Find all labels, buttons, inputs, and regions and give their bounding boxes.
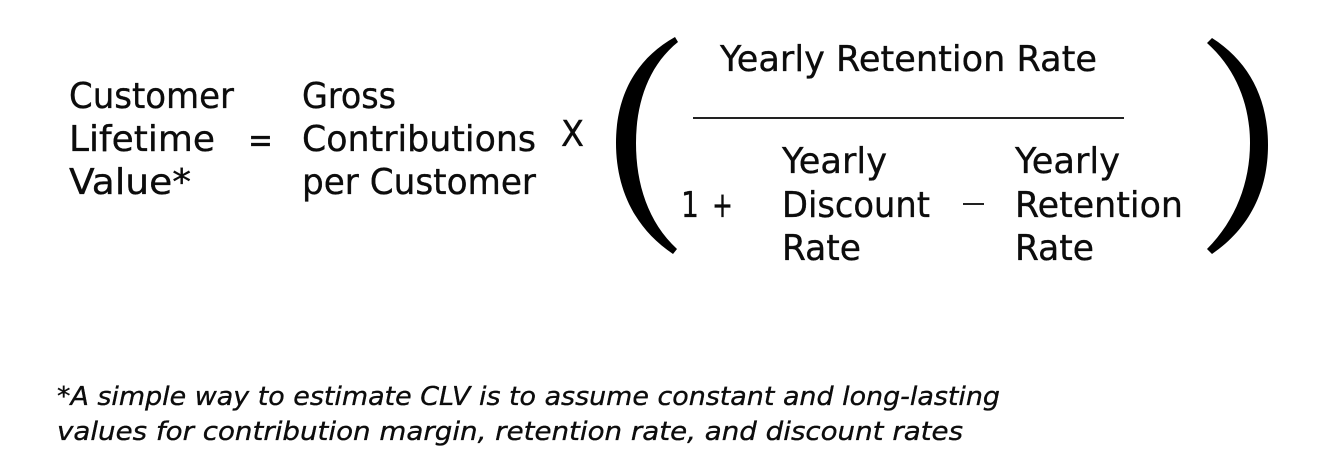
one plus: + xyxy=(712,185,733,226)
equals sign: = xyxy=(248,120,273,161)
yearly retention rate: Rate xyxy=(1015,228,1094,269)
left parenthesis xyxy=(616,37,678,254)
text: gross contributions per customer xyxy=(302,76,536,203)
right parenthesis xyxy=(1207,38,1268,254)
yearly retention rate: Yearly xyxy=(1014,141,1120,182)
one plus xyxy=(681,185,733,226)
heading: customer lifetime value xyxy=(69,76,234,203)
numerator: yearly retention rate: Yearly Retention Rate xyxy=(719,39,1097,80)
text: gross contributions per customer: Contributions xyxy=(302,119,536,160)
fraction bar xyxy=(693,117,1124,119)
yearly discount rate: Discount xyxy=(782,185,930,226)
footnote xyxy=(57,382,1000,447)
yearly discount rate: Yearly xyxy=(781,141,887,182)
text: gross contributions per customer: Gross xyxy=(302,76,396,117)
heading: customer lifetime value: Value* xyxy=(69,162,191,203)
footnote: values for contribution margin, retention rate, and discount rates xyxy=(57,417,963,447)
one plus: 1 xyxy=(681,185,699,226)
heading: customer lifetime value: Lifetime xyxy=(69,119,215,160)
yearly retention rate xyxy=(1014,141,1183,269)
yearly discount rate: Rate xyxy=(782,228,861,269)
heading: customer lifetime value: Customer xyxy=(69,76,234,117)
multiplication sign: X xyxy=(561,114,584,155)
text: gross contributions per customer: per Customer xyxy=(302,162,536,203)
footnote: *A simple way to estimate CLV is to assume constant and long-lasting xyxy=(57,382,1000,412)
denominator xyxy=(681,141,1183,269)
yearly discount rate xyxy=(781,141,930,269)
yearly retention rate: Retention xyxy=(1015,185,1183,226)
minus sign xyxy=(963,203,984,205)
